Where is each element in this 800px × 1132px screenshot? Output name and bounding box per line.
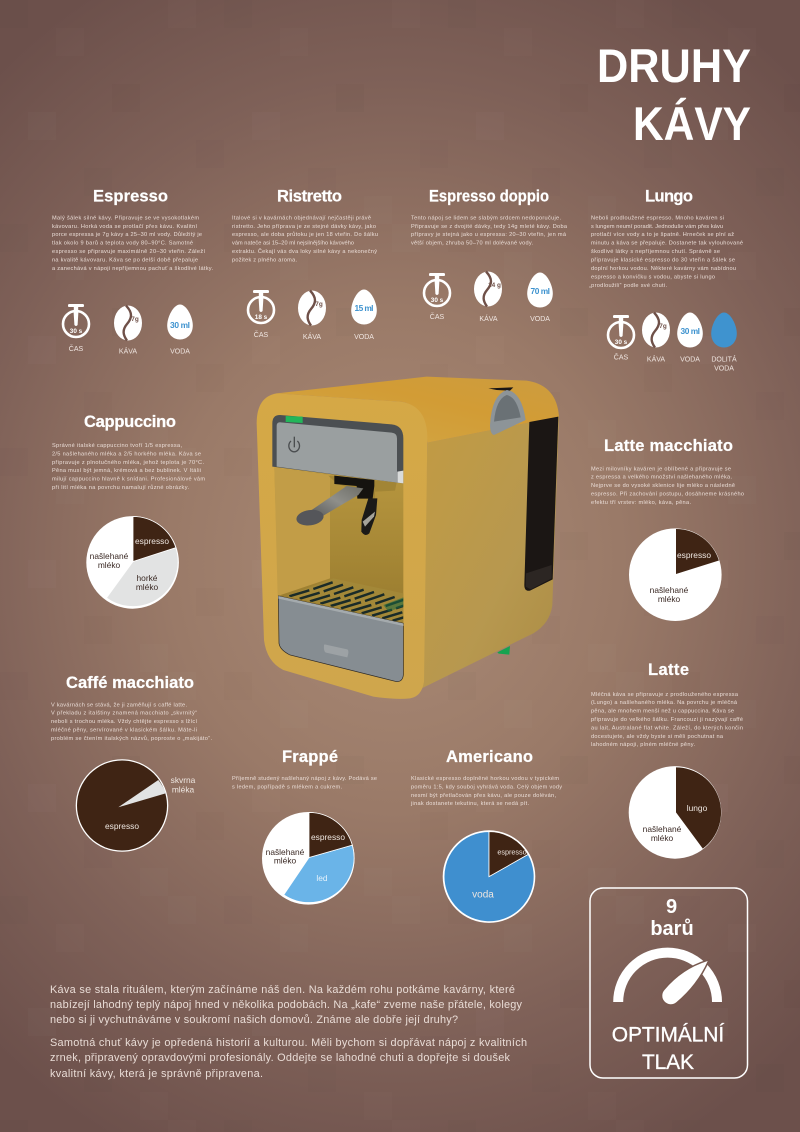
heading: Lungo [645,187,693,205]
text block: Tento nápoj se lidem se slabým srdcem nedoporučuje. [411,215,561,221]
pressure label: TLAK [642,1051,694,1074]
labels: KÁVA [479,314,498,323]
text block [232,776,377,790]
pie chart: espresso [135,536,169,546]
labels: ČAS [69,344,84,353]
text block: problém se čtením italských názvů, poproste o „makijáto“. [51,735,212,742]
text block: Příjemně studený našlehaný nápoj z kávy. Podává se [232,776,377,782]
text block: ristretto. Jeho příprava je ze stejné dávky kávy, jako [232,224,376,230]
text block: Mezi milovníky kaváren je oblíbené a připravuje se [591,466,731,472]
heading: Espresso doppio [429,187,549,205]
pie chart [629,528,722,621]
heading: Ristretto [277,188,342,206]
text block: (Lungo) a našlehaného mléka. Na povrchu je mléčná [591,700,738,706]
text block: Klasické espresso doplněné horkou vodou v typickém [411,776,559,782]
icon: water drop 70 ml [527,272,553,308]
pressure label: OPTIMÁLNÍ [612,1024,724,1047]
text block: s lungem neumí poradit. Jednoduše vám přes kávu [591,224,723,230]
title [597,39,751,150]
text block: milují cappuccino hlavně k snídani. Profesionálové vám [52,477,205,483]
icon: water drop 30 ml: 30 ml [680,326,700,336]
pie chart [443,830,535,923]
pie chart [86,516,179,609]
panel: frappe [232,748,377,905]
machine side [422,417,559,688]
labels [614,352,737,372]
icon: stopwatch 18 s [248,290,274,323]
pie chart: mléko [136,582,159,592]
icon: stopwatch 30 s: 30 s [615,339,628,346]
icon: stopwatch 30 s [608,315,634,348]
text block: kávovaru. Horká voda se protlačí přes kávu. Kvalitní [52,224,197,230]
panel: americano [410,748,562,923]
pie chart: mléka [172,784,195,794]
text block: V překladu z italštiny znamená macchiato „skvrnitý“ [51,711,197,717]
text block: doplní horkou vodou. Některé kavárny vám nabídnou [591,266,736,272]
intro text: Samotná chuť kávy je opředená historií a kulturou. Měli bychom si dopřávat nápoj z kvalitních [50,1037,527,1049]
labels: VODA [680,356,700,364]
text block: pěna, ale mnohem menší než u cappuccina. Káva se [591,709,734,715]
intro text: kvalitní kávy, která je správně připravena. [50,1068,263,1080]
icon: coffee bean 7 g: 7g [659,323,667,330]
text block [52,215,213,272]
pie chart: espresso [497,848,527,856]
panel: cappuccino [52,413,205,609]
text block: au lait, Australané flat white. Záleží, do kterých končin [591,725,743,731]
pie chart: našlehané [643,824,682,834]
labels: ČAS [614,352,629,362]
intro text: nebo si ji vychutnáváme v soukromí našich domovů. Známe ale dobře její druhy? [50,1014,458,1026]
panel: caffe macchiato [51,674,212,852]
text block: Malý šálek silné kávy. Připravuje se ve vysokotlakém [52,215,199,221]
heading: Espresso [93,188,168,206]
steam wand and group head [295,476,397,535]
text block: vám nateče asi 15–20 ml nejsilnějšího kávového [232,241,354,247]
heading: Latte macchiato [604,437,733,455]
text block: espresso. Při zachování postupu, dosáhneme krásného [591,492,744,498]
text block: docestujete, ale vždy byste si měli pochutnat na [591,734,724,740]
labels: KÁVA [303,332,321,341]
icon: stopwatch 30 s [424,273,450,306]
pressure value [650,896,694,940]
pie chart [262,812,355,905]
side window [524,417,558,591]
text block: mléčné pěny, servírované v klasickém šálku. Máte-li [51,728,197,734]
text block [51,702,212,742]
heading: Cappuccino [84,413,176,431]
icon: water drop 15 ml: 15 ml [354,303,374,313]
labels: ČAS [254,330,269,339]
intro text: zrnek, připravený opravdovými profesionály. Oddejte se lahodné chuti a dopřejte si doušek [50,1052,511,1064]
text block: a zanechává v nápoji nepříjemnou pachuť a škodlivé látky. [52,266,213,272]
icon: water drop 70 ml: 70 ml [530,286,550,296]
panel: latte [591,661,743,859]
icon: stopwatch 18 s: 18 s [255,314,268,321]
labels: VODA [354,334,374,341]
icon: coffee bean 7 g: 7g [315,301,323,308]
pie chart: voda [472,890,494,900]
text block: espresso, ale doba průtoku je jen 18 vteřin. Do šálku [232,231,378,238]
icon: coffee bean 14 g [474,272,502,306]
machine front [257,393,427,699]
labels [69,344,190,356]
text block [589,215,743,289]
pressure value: 9 [666,896,677,918]
cavity [274,467,403,624]
text block: Správné italské cappuccino tvoří 1/5 espressa, [52,443,182,449]
panel: ristretto [232,188,378,341]
pressure label [612,1024,724,1074]
pie chart: horké [137,573,158,583]
text block: poměru 1:5, kdy souboj vyhrává voda. Celý objem vody [411,784,562,790]
pie chart: mléko [651,833,674,843]
labels: VODA [530,316,550,323]
icon: water drop 30 ml: 30 ml [170,320,190,330]
text block [591,692,743,748]
pie chart: espresso [677,550,711,560]
text block: espresso se připravuje maximálně 20–30 vteřin. Záleží [52,249,205,255]
text block: porce espressa je 7g kávy a 25–30 ml vody. Důležitý je [52,231,202,238]
text block [591,466,744,506]
pie chart: mléko [98,560,121,570]
title: DRUHY [597,39,751,92]
control panel [272,415,403,483]
icon: coffee bean 7 g [114,306,142,340]
text block: nesmí být přetlačován přes kávu, ale pouze doléván, [411,793,556,799]
text block: V kavárnách se stává, že ji zaměňují s caffé latte. [51,702,187,708]
pie chart: mléko [658,594,681,604]
title: KÁVY [633,97,751,150]
pie chart: našlehané [266,847,305,857]
text block: při lití mléka na povrchu namalují různé obrázky. [52,484,189,491]
pie chart: mléko [274,856,297,866]
panel: espresso doppio [411,187,568,323]
icon: stopwatch 30 s [63,304,89,337]
labels [254,330,374,341]
heading: Americano [446,748,533,766]
text block: větší objem, zhruba 50–70 ml dolévané vody. [411,241,533,247]
icon: stopwatch 30 s: 30 s [431,297,444,304]
text block: Neboli prodloužené espresso. Mnoho kaváren si [591,215,724,221]
icon: water drop 30 ml [167,304,193,340]
water tank handle [488,387,526,435]
pressure value: barů [650,918,694,940]
heading: Caffé macchiato [66,674,194,692]
text block: z espressa a velkého množství našlehaného mléka. [591,475,732,481]
machine top [277,377,559,443]
heading: Latte [648,661,689,679]
text block: protlačí více vody a to je špatně. Hrneček se plní až [591,232,734,238]
text block: espresso a konvičku s vodou, abyste si lungo [591,274,715,280]
intro text: nabízejí lahodný teplý nápoj hned v několika podobách. Na „kafe“ zveme naše přátele, kolegy [50,999,523,1011]
text block [52,443,205,491]
green light [286,416,303,423]
coffee machine [257,377,559,699]
labels: KÁVA [647,354,665,364]
icon: coffee bean 14 g: 14 g [488,282,501,289]
power icon [289,437,299,452]
icon: blue water drop [711,312,737,348]
text block: jinak dostanete tekutinu, která se nedá pít. [410,801,529,807]
text block: připravuje do velkého šálku. Francouzi ji nazývají caffé [591,717,743,723]
text block [411,215,568,247]
labels: KÁVA [119,346,137,356]
icon: coffee bean 7 g: 7g [131,316,139,323]
drawer [278,596,403,682]
heading: Frappé [282,748,338,766]
text block: Pěna musí být jemná, krémová a bez bublinek. V Itálii [52,468,201,474]
panel: optimal pressure [590,888,748,1078]
labels: VODA [170,348,190,356]
text block: extraktu. Čekají vás dva loky silné kávy a nekonečný [232,248,377,255]
text block: Nejprve se do vysoké sklenice lije mléko a následně [591,483,735,489]
text block: „prodloužili“ podle své chuti. [589,283,667,289]
panel: latte macchiato [591,437,744,621]
text block: přípravy je stejná jako u espressa: 20–30 vteřin, jen má [411,232,567,238]
icon: gauge [618,953,717,1004]
text block [232,215,378,264]
text block: 2/5 našlehaného mléka a 2/5 horkého mléka. Káva se [52,451,201,457]
text block: tlak okolo 9 barů a teplota vody 80–90°C. Samotné [52,240,193,247]
text block: Mléčná káva se připravuje z prodlouženého espressa [591,692,739,698]
text block: efektu tří vrstev: mléko, káva, pěna. [591,500,691,506]
intro text: Káva se stala rituálem, kterým začínáme náš den. Na každém rohu potkáme kavárny, které [50,984,515,996]
text block: lahodném nápoji, plném mléčné pěny. [591,742,695,748]
text block: neboli s trochou mléka. Vždy chtějte espresso s lžící [51,719,197,725]
text block: na kvalitě kávovaru. Káva se po delší době přepaluje [52,258,198,264]
pie chart: skvrna [171,775,196,785]
green foot [497,646,510,655]
text block: požitek z plného aroma. [232,258,297,264]
pie chart [629,766,721,859]
text block: Připravuje se z dvojité dávky, tedy 14g mleté kávy. Doba [411,224,568,230]
panel: espresso [52,188,213,356]
text block: s ledem, popřípadě s mlékem a cukrem. [232,784,342,790]
icon: coffee bean 7 g [298,290,326,326]
pie chart: espresso [311,832,345,842]
text block: Italové si v kavárnách objednávají nejčastěji právě [232,215,371,221]
panel: lungo [589,187,743,372]
icon: stopwatch 30 s: 30 s [70,328,83,335]
text block [410,776,562,807]
pie chart: našlehané [90,551,129,561]
labels: ČAS [430,312,445,321]
pie chart: espresso [105,821,139,831]
icon: coffee bean 7 g [642,312,670,348]
intro text [50,984,527,1080]
text block: připravuje klasické espresso do 30 vteřin a šálek se [591,258,735,264]
pie chart: našlehané [650,585,689,595]
text block: připravuje z plnotučného mléka, jehož teplota je 70°C. [52,460,204,466]
drip grate [288,581,404,622]
icon: water drop 15 ml [351,290,377,324]
labels [430,312,550,323]
text block: minutu a káva se přepaluje. Dostanete tak vylouhované [591,241,743,247]
labels: VODA [714,366,734,372]
icon: water drop 30 ml [677,312,703,348]
pie chart [76,759,196,852]
labels: DOLITÁ [711,354,737,364]
pie chart: led [316,873,328,883]
text block: škodlivé látky s nepříjemnou chutí. Správně se [591,249,720,255]
pie chart: lungo [687,803,708,813]
